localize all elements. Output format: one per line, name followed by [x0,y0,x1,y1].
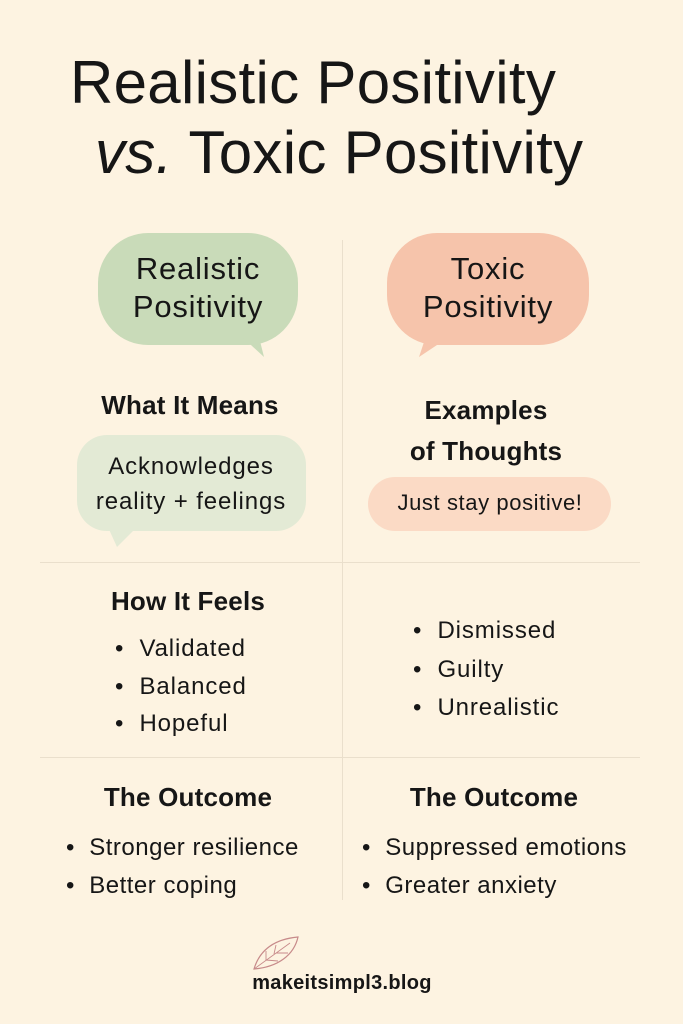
heading: examples of thoughts: of Thoughts [410,436,562,466]
list: outcome realistic [66,834,299,899]
bubble: toxic positivity: Toxic [451,251,525,286]
box: acknowledges [77,435,306,547]
bubble: toxic positivity [387,233,589,357]
bubble: realistic positivity: Positivity [133,289,263,324]
pill: just stay positive: Just stay positive! [397,490,583,515]
list: outcome realistic: • Stronger resilience [66,834,299,861]
title: Realistic Positivity [70,49,556,116]
list: feels realistic: • Hopeful [115,710,228,737]
box: acknowledges: reality + feelings [96,488,286,515]
heading: examples of thoughts [410,395,562,466]
list: feels toxic: • Dismissed [413,617,556,644]
pill: just stay positive [368,477,611,531]
title: vs. Toxic Positivity [95,119,583,186]
heading: examples of thoughts: Examples [424,395,548,425]
bubble: realistic positivity [98,233,298,357]
list: outcome toxic: • Greater anxiety [362,872,557,899]
icon: leaf [253,936,299,970]
title [70,49,583,186]
box: acknowledges: Acknowledges [108,453,274,480]
bubble: realistic positivity: Realistic [136,251,260,286]
list: feels toxic [413,617,559,721]
footer: makeitsimpl3.blog [252,972,432,994]
heading: what it means: What It Means [101,390,279,420]
heading: outcome realistic: The Outcome [104,782,272,812]
heading: how it feels: How It Feels [111,586,265,616]
bubble: toxic positivity: Positivity [423,289,553,324]
list: outcome realistic: • Better coping [66,872,237,899]
list: outcome toxic: • Suppressed emotions [362,834,627,861]
list: feels realistic: • Validated [115,635,246,662]
heading: outcome toxic: The Outcome [410,782,578,812]
list: feels toxic: • Guilty [413,656,504,682]
list: feels realistic [115,635,247,737]
list: feels realistic: • Balanced [115,672,247,700]
list: outcome toxic [362,834,627,899]
list: feels toxic: • Unrealistic [413,694,559,721]
